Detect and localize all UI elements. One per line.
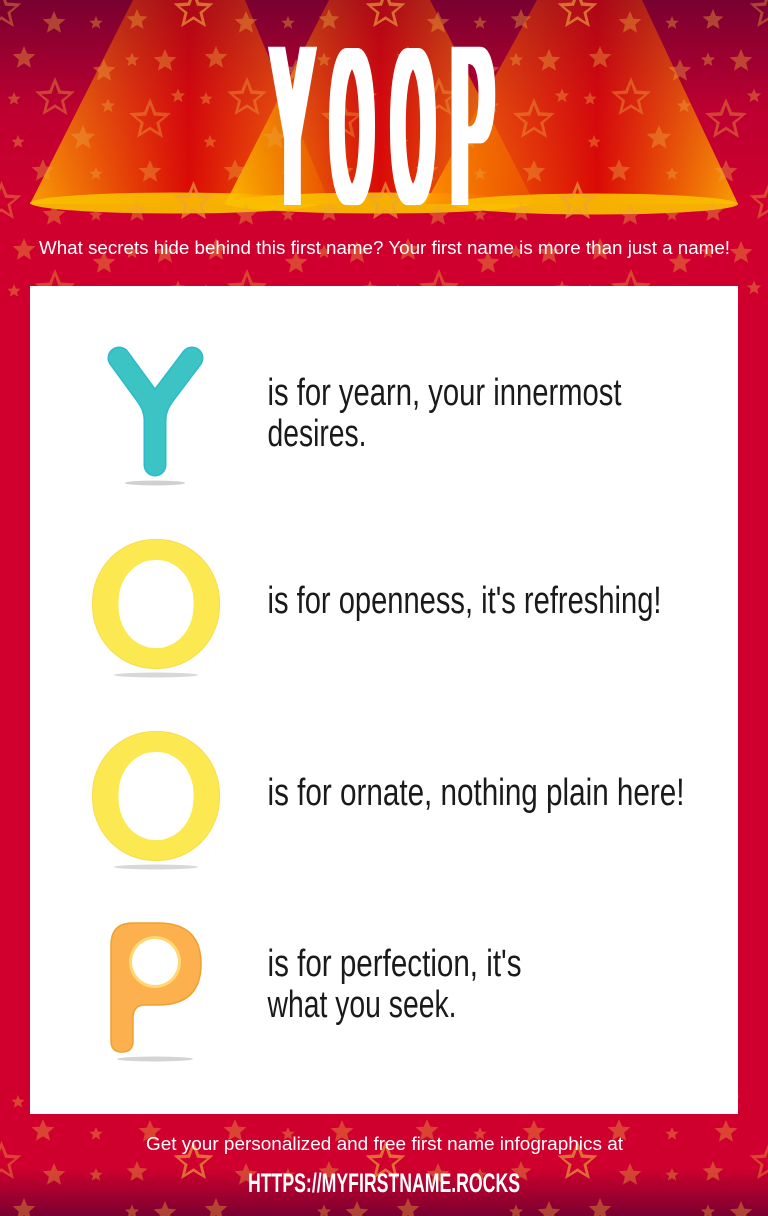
text: P line: what you seek.	[267, 984, 456, 1026]
spotlight: left	[30, 0, 330, 214]
icon: letter O	[92, 732, 220, 870]
title: Y	[272, 0, 313, 254]
spotlight: right	[425, 0, 738, 214]
icon: letter O	[92, 540, 220, 678]
title: O	[332, 3, 372, 251]
footer text: Get your personalized and free first name infographics at	[146, 1133, 623, 1154]
icon: letter P	[111, 923, 201, 1062]
spotlights	[30, 0, 738, 214]
text: P	[452, 0, 493, 254]
subtitle: What secrets hide behind this first name? Your first name is more than just a name!	[39, 237, 730, 258]
text: first O line: is for openness, it's refreshing!	[268, 580, 662, 622]
spotlight: middle	[225, 0, 535, 214]
text: P line: is for perfection, it's	[268, 943, 522, 985]
title: O	[393, 3, 433, 251]
text: Y line: desires.	[268, 413, 366, 455]
footer url: HTTPS://MYFIRSTNAME.ROCKS	[248, 1168, 520, 1198]
title	[272, 0, 493, 254]
icon: letter Y	[119, 358, 192, 486]
panel: letters	[30, 286, 738, 1114]
text: Y line: is for yearn, your innermost	[268, 372, 622, 414]
